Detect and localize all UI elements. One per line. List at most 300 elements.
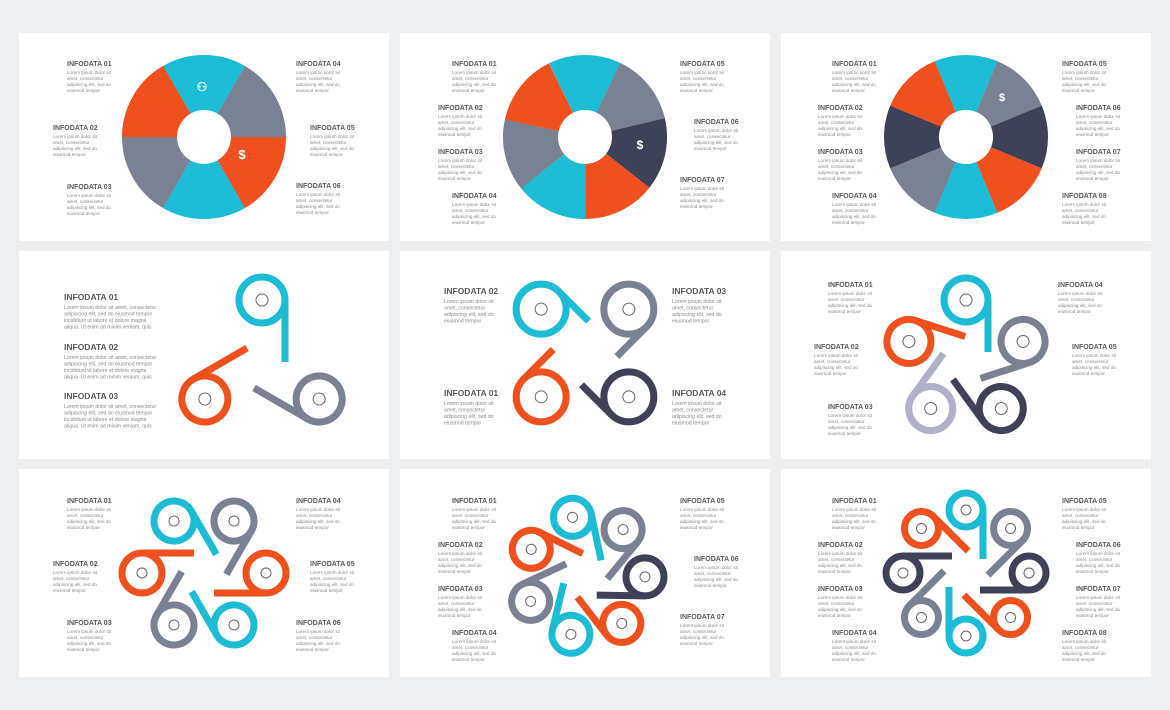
text: labels 01-06: amet, consectetur [67,199,104,204]
text: labels 01-07: adipiscing elit, sed do [438,126,482,131]
text: labels: eiusmod tempor [832,525,865,530]
text: labels: incididunt ut labore et dolore magna [64,368,147,374]
text: labels 01-07: Lorem ipsum dolor sit [452,70,497,75]
text: labels: amet, consectetur [672,408,714,414]
text: labels 01-06: amet, consectetur [53,140,90,145]
text: labels: adipiscing elit, sed do eiusmod tempor [64,362,153,368]
text: labels 01-08: Lorem ipsum dolor sit [818,158,863,163]
text: labels 01-06: INFODATA 06 [296,183,341,190]
text: labels: amet, consectetur [296,635,333,640]
text: labels: eiusmod tempor [452,525,485,530]
text: labels 01-07: amet, consectetur [438,120,475,125]
text: labels: amet, consectetur [672,306,714,312]
text: labels 01-06: amet, consectetur [67,76,104,81]
text: labels: eiusmod tempor [680,525,713,530]
text: labels 01-07: INFODATA 02 [438,105,483,112]
text: labels 01-08: eiusmod tempor [832,88,865,93]
panel: wheel 6 [53,61,355,216]
text: labels 01-08: INFODATA 06 [1076,105,1121,112]
text: labels: Lorem ipsum dolor sit amet, consectetur [64,404,157,410]
text: labels 01-07: adipiscing elit, sed do [438,170,482,175]
text: labels: adipiscing elit, sed do [1058,303,1102,308]
text: labels: Lorem ipsum dolor sit [672,401,722,407]
text: labels 01-06: adipiscing elit, sed do [310,146,354,151]
text: labels 01-07: amet, consectetur [694,134,731,139]
text: labels: INFODATA 06 [1076,542,1121,549]
text: labels: INFODATA 05 [1072,344,1117,351]
text: labels 01-07: adipiscing elit, sed do [452,82,496,87]
text: labels 01-07: Lorem ipsum dolor sit [438,114,483,119]
text: labels 01-06: Lorem ipsum dolor sit [67,193,112,198]
text: labels: Lorem ipsum dolor sit [832,639,877,644]
text: labels 01-08: adipiscing elit, sed do [1076,170,1120,175]
text: labels 01-07: adipiscing elit, sed do [680,198,724,203]
text: labels 01-06: INFODATA 04 [296,61,341,68]
text: labels: eiusmod tempor [1058,309,1091,314]
text: labels: eiusmod tempor [53,588,86,593]
text: labels: INFODATA 04 [672,388,726,398]
text: labels: INFODATA 05 [1062,498,1107,505]
text: labels: amet, consectetur [1058,297,1095,302]
text: labels: eiusmod tempor [828,309,861,314]
text: labels 01-07: INFODATA 07 [680,177,725,184]
text: labels 01-08: adipiscing elit, sed do [1062,82,1106,87]
text: labels [444,286,726,426]
text: labels: Lorem ipsum dolor sit amet, consectetur [64,355,157,361]
text: labels: INFODATA 02 [53,561,98,568]
text: labels: Lorem ipsum dolor sit [444,401,494,407]
text: labels 01-08: eiusmod tempor [1062,88,1095,93]
text: labels 01-07: amet, consectetur [452,208,489,213]
text: labels 01-06: amet, consectetur [310,140,347,145]
text: labels 01-07: Lorem ipsum dolor sit [694,128,739,133]
chart: 3 loops [173,277,351,430]
text: labels 01-06: INFODATA 03 [67,184,112,191]
chart: 8-segment wheel: $ [999,92,1005,104]
text: labels: INFODATA 01 [832,498,877,505]
panel: 3 loops [64,277,351,430]
text: labels: Lorem ipsum dolor sit [832,507,877,512]
text: labels: Lorem ipsum dolor sit amet, consectetur [64,305,157,311]
text: labels 01-07: INFODATA 04 [452,193,497,200]
text: labels: adipiscing elit, sed do [680,519,724,524]
chart: 8 loops [886,493,1046,653]
text: labels 01-07: INFODATA 03 [438,149,483,156]
text: labels 01-06: eiusmod tempor [67,88,100,93]
text: labels 01-07: eiusmod tempor [438,132,471,137]
text: labels 01-08: amet, consectetur [1062,208,1099,213]
text: labels: eiusmod tempor [694,583,727,588]
text: labels: adipiscing elit, sed do [1072,365,1116,370]
text: labels 01-08: eiusmod tempor [1062,220,1095,225]
text: labels 01-06: eiusmod tempor [296,88,329,93]
text: labels 01-08: Lorem ipsum dolor sit [832,70,877,75]
text: labels: eiusmod tempor [672,420,709,426]
text: labels: amet, consectetur [67,513,104,518]
text: labels: amet, consectetur [310,576,347,581]
text: labels 01-08: INFODATA 07 [1076,149,1121,156]
text: labels: INFODATA 05 [680,498,725,505]
text: labels: INFODATA 03 [672,286,726,296]
text: labels 01-06: eiusmod tempor [67,211,100,216]
text: labels: amet, consectetur [680,629,717,634]
text: labels 01-08: eiusmod tempor [818,132,851,137]
panel: 8 loops [818,493,1121,662]
text: labels: INFODATA 07 [1076,586,1121,593]
text: labels 01-08: eiusmod tempor [1076,132,1109,137]
text: labels 01-07: Lorem ipsum dolor sit [680,186,725,191]
text: labels: amet, consectetur [438,601,475,606]
text: labels: adipiscing elit, sed do [310,582,354,587]
text: labels 01-08: amet, consectetur [1076,164,1113,169]
text: labels: Lorem ipsum dolor sit [67,507,112,512]
text: labels 01-06: INFODATA 01 [67,61,112,68]
text: labels: adipiscing elit, sed do [296,641,340,646]
text: labels 01-07: adipiscing elit, sed do [694,140,738,145]
text: labels: amet, consectetur [444,306,486,312]
text: labels: INFODATA 01 [67,498,112,505]
text: labels: adipiscing elit, sed do [832,651,876,656]
text: labels: amet, consectetur [680,513,717,518]
text: labels: amet, consectetur [1076,601,1113,606]
text: labels: Lorem ipsum dolor sit [818,595,863,600]
text: labels: INFODATA 02 [814,344,859,351]
text: labels: eiusmod tempor [438,613,471,618]
text: labels: INFODATA 04 [296,498,341,505]
text: labels: incididunt ut labore et dolore magna [64,318,147,324]
text: labels: eiusmod tempor [1062,657,1095,662]
text: labels 01-07: Lorem ipsum dolor sit [680,70,725,75]
text: labels: eiusmod tempor [444,420,481,426]
text: labels 01-06: eiusmod tempor [53,152,86,157]
text: labels: eiusmod tempor [1076,569,1109,574]
text: labels: INFODATA 04 [452,630,497,637]
text: labels: adipiscing elit, sed do [1062,519,1106,524]
text: labels: Lorem ipsum dolor sit [310,570,355,575]
text: labels 01-06: amet, consectetur [296,76,333,81]
text: labels: INFODATA 06 [296,620,341,627]
text: labels: amet, consectetur [818,557,855,562]
text: labels: Lorem ipsum dolor sit [444,299,494,305]
text: labels: INFODATA 06 [694,556,739,563]
text: labels: Lorem ipsum dolor sit [1062,639,1107,644]
text: labels: Lorem ipsum dolor sit [818,551,863,556]
text: labels 01-07: eiusmod tempor [694,146,727,151]
text: labels 01-06: adipiscing elit, sed do [67,82,111,87]
text: labels 01-06: INFODATA 05 [310,125,355,132]
text: labels 01-08: INFODATA 04 [832,193,877,200]
text: labels 01-07: INFODATA 01 [452,61,497,68]
text: labels 01-07: adipiscing elit, sed do [680,82,724,87]
text: labels: adipiscing elit, sed do [296,519,340,524]
text: labels: adipiscing elit, sed do [818,563,862,568]
text: labels [438,498,739,662]
text: labels 01-08: Lorem ipsum dolor sit [1076,114,1121,119]
text: labels 01-07 [438,61,739,225]
text: labels: Lorem ipsum dolor sit [1076,551,1121,556]
text: labels: adipiscing elit, sed do [832,519,876,524]
text: labels 01-06: amet, consectetur [296,198,333,203]
text: labels 01-08: adipiscing elit, sed do [832,214,876,219]
text: labels 01-08: adipiscing elit, sed do [818,170,862,175]
text: labels: Lorem ipsum dolor sit [1062,507,1107,512]
text: labels: adipiscing elit, sed do [1076,607,1120,612]
text: labels: eiusmod tempor [444,318,481,324]
text: labels 01-06: Lorem ipsum dolor sit [296,70,341,75]
text: labels: INFODATA 03 [828,404,873,411]
text: labels: eiusmod tempor [1076,613,1109,618]
chart: 7-segment wheel [508,60,662,214]
text: labels: amet, consectetur [296,513,333,518]
text: labels: adipiscing elit, sed do eiusmod tempor [64,410,153,416]
text: labels: adipiscing elit, sed do [1062,651,1106,656]
text: labels: Lorem ipsum dolor sit [53,570,98,575]
text: labels: INFODATA 02 [64,342,118,352]
text: labels 01-08: amet, consectetur [818,164,855,169]
text: labels 01-08: INFODATA 03 [818,149,863,156]
text: labels: eiusmod tempor [452,657,485,662]
text: labels: INFODATA 03 [67,620,112,627]
text: labels: eiusmod tempor [438,569,471,574]
text: labels: adipiscing elit, sed do [672,312,722,318]
text: labels 01-07: amet, consectetur [680,76,717,81]
text: labels 01-06: Lorem ipsum dolor sit [53,134,98,139]
text: labels 01-08: amet, consectetur [832,208,869,213]
text: labels 01-06: eiusmod tempor [310,152,343,157]
text: labels: eiusmod tempor [67,647,100,652]
text: labels: Lorem ipsum dolor sit [828,413,873,418]
text: labels: incididunt ut labore et dolore magna [64,417,147,423]
text: labels: eiusmod tempor [1072,371,1105,376]
text: labels: INFODATA 02 [818,542,863,549]
text: labels 01-07: INFODATA 05 [680,61,725,68]
text: labels 01-08: eiusmod tempor [818,176,851,181]
text: labels: adipiscing elit, sed do [672,414,722,420]
text: labels: Lorem ipsum dolor sit [1076,595,1121,600]
text: labels: eiusmod tempor [818,569,851,574]
text: labels: amet, consectetur [452,645,489,650]
text: labels 01-08: INFODATA 02 [818,105,863,112]
text: labels 01-06: INFODATA 02 [53,125,98,132]
text: labels: adipiscing elit, sed do [818,607,862,612]
text: labels 01-08: amet, consectetur [1062,76,1099,81]
text: labels 01-07: amet, consectetur [452,76,489,81]
text: labels: eiusmod tempor [832,657,865,662]
text: labels: Lorem ipsum dolor sit [672,299,722,305]
panel: 4 loops [444,274,726,432]
text: labels: adipiscing elit, sed do [67,519,111,524]
text: labels: INFODATA 07 [680,614,725,621]
text: labels: Lorem ipsum dolor sit [694,565,739,570]
text: labels: Lorem ipsum dolor sit [452,639,497,644]
text: labels: adipiscing elit, sed do [680,635,724,640]
text: labels 01-08: adipiscing elit, sed do [832,82,876,87]
text: labels: amet, consectetur [53,576,90,581]
text: labels: eiusmod tempor [814,371,847,376]
text: labels: adipiscing elit, sed do [694,577,738,582]
chart: 5 loops [881,278,1051,439]
text: labels: adipiscing elit, sed do [452,519,496,524]
text: labels: INFODATA 01 [452,498,497,505]
text: labels 01-08: amet, consectetur [818,120,855,125]
text: labels: Lorem ipsum dolor sit [1072,353,1117,358]
text: labels 01-06: Lorem ipsum dolor sit [67,70,112,75]
text: labels [818,498,1121,662]
text: labels: eiusmod tempor [680,641,713,646]
text: labels: INFODATA 08 [1062,630,1107,637]
text: labels: eiusmod tempor [828,431,861,436]
text: labels: adipiscing elit, sed do [438,563,482,568]
text: labels: amet, consectetur [452,513,489,518]
text: labels 01-08: amet, consectetur [832,76,869,81]
text: labels: INFODATA 04 [832,630,877,637]
text: labels: Lorem ipsum dolor sit [438,595,483,600]
panel: wheel 8 [818,61,1121,225]
text: labels: INFODATA 05 [310,561,355,568]
text: labels: aliqua. Ut enim ad minim veniam, quis [64,324,152,330]
text: labels [64,292,157,430]
text: labels: amet, consectetur [1062,645,1099,650]
text: labels: amet, consectetur [694,571,731,576]
text: labels: amet, consectetur [438,557,475,562]
text: labels: Lorem ipsum dolor sit [814,353,859,358]
panel: wheel 7 [438,60,739,225]
text: labels: eiusmod tempor [310,588,343,593]
chart: 6 loops [122,494,286,652]
text: labels: amet, consectetur [828,419,865,424]
text: labels: adipiscing elit, sed do [828,303,872,308]
text: labels: amet, consectetur [818,601,855,606]
chart: 4 loops [506,274,664,432]
text: labels: amet, consectetur [444,408,486,414]
text: labels: INFODATA 02 [444,286,498,296]
text: labels: amet, consectetur [1076,557,1113,562]
text: labels: aliqua. Ut enim ad minim veniam, quis [64,374,152,380]
text: labels [814,282,1117,436]
text: labels: INFODATA 01 [444,388,498,398]
text: labels 01-08: Lorem ipsum dolor sit [1062,202,1107,207]
text: labels: Lorem ipsum dolor sit [452,507,497,512]
text: labels 01-08: INFODATA 05 [1062,61,1107,68]
text: labels 01-08: INFODATA 08 [1062,193,1107,200]
text: labels: amet, consectetur [814,359,851,364]
panel: 7 loops [438,495,739,662]
text: labels 01-07: eiusmod tempor [438,176,471,181]
text: labels 01-07: amet, consectetur [438,164,475,169]
text: labels: INFODATA 01 [828,282,873,289]
text: labels 01-07: Lorem ipsum dolor sit [438,158,483,163]
text: labels 01-07: eiusmod tempor [680,204,713,209]
text: labels: adipiscing elit, sed do [444,414,494,420]
text: labels: Lorem ipsum dolor sit [296,629,341,634]
text: labels 01-08: adipiscing elit, sed do [818,126,862,131]
text: labels: adipiscing elit, sed do [444,312,494,318]
text: labels 01-08: adipiscing elit, sed do [1062,214,1106,219]
text: labels: adipiscing elit, sed do [814,365,858,370]
text: labels: INFODATA 02 [438,542,483,549]
text: labels 01-07: INFODATA 06 [694,119,739,126]
text: labels: amet, consectetur [1072,359,1109,364]
text: labels: eiusmod tempor [1062,525,1095,530]
text: labels: INFODATA 04 [1058,282,1103,289]
text: labels 01-08: eiusmod tempor [832,220,865,225]
text: labels: amet, consectetur [832,645,869,650]
text: labels 01-07: amet, consectetur [680,192,717,197]
text: labels 01-08: Lorem ipsum dolor sit [818,114,863,119]
text: labels: Lorem ipsum dolor sit [438,551,483,556]
text: labels 01-08: eiusmod tempor [1076,176,1109,181]
text: labels: eiusmod tempor [818,613,851,618]
text: labels: adipiscing elit, sed do [452,651,496,656]
panel: 6 loops [53,494,355,652]
chart: 6-segment wheel: $ [238,147,246,162]
text: labels: adipiscing elit, sed do [53,582,97,587]
text: labels 01-06 [53,61,355,216]
text: labels: INFODATA 03 [438,586,483,593]
text: labels: eiusmod tempor [672,318,709,324]
text: labels 01-08 [818,61,1121,225]
text: labels: Lorem ipsum dolor sit [1058,291,1103,296]
text: labels: eiusmod tempor [296,647,329,652]
text: labels: amet, consectetur [1062,513,1099,518]
text: labels 01-07: Lorem ipsum dolor sit [452,202,497,207]
text: labels 01-07: eiusmod tempor [452,220,485,225]
chart: 6-segment wheel [130,63,278,211]
chart: 7 loops [505,495,664,657]
text: labels 01-06: Lorem ipsum dolor sit [296,192,341,197]
text: labels 01-07: eiusmod tempor [452,88,485,93]
text: labels 01-08: amet, consectetur [1076,120,1113,125]
text: labels: INFODATA 03 [64,391,118,401]
text: labels 01-08: Lorem ipsum dolor sit [1062,70,1107,75]
text: labels [53,498,355,652]
text: labels: Lorem ipsum dolor sit [828,291,873,296]
chart: 7-segment wheel: $ [637,138,644,152]
panel: 5 loops [814,278,1117,439]
text: labels: Lorem ipsum dolor sit [67,629,112,634]
text: labels: eiusmod tempor [296,525,329,530]
text: labels 01-06: adipiscing elit, sed do [53,146,97,151]
text: labels 01-08: Lorem ipsum dolor sit [832,202,877,207]
text: labels 01-06: adipiscing elit, sed do [67,205,111,210]
text: labels: adipiscing elit, sed do eiusmod tempor [64,312,153,318]
text: labels 01-06: eiusmod tempor [296,210,329,215]
text: labels: amet, consectetur [828,297,865,302]
text: labels: adipiscing elit, sed do [67,641,111,646]
chart: 6-segment wheel: ⚇ [197,80,208,94]
text: labels: adipiscing elit, sed do [438,607,482,612]
text: labels 01-06: adipiscing elit, sed do [296,82,340,87]
text: labels: INFODATA 01 [64,292,118,302]
chart: 8-segment wheel [895,66,1037,208]
text: labels: Lorem ipsum dolor sit [296,507,341,512]
text: labels: adipiscing elit, sed do [828,425,872,430]
text: labels 01-06: Lorem ipsum dolor sit [310,134,355,139]
text: labels: Lorem ipsum dolor sit [680,623,725,628]
text: labels 01-08: Lorem ipsum dolor sit [1076,158,1121,163]
text: labels: amet, consectetur [67,635,104,640]
text: labels: Lorem ipsum dolor sit [680,507,725,512]
text: labels: adipiscing elit, sed do [1076,563,1120,568]
text: labels: INFODATA 03 [818,586,863,593]
text: labels 01-07: eiusmod tempor [680,88,713,93]
text: labels: aliqua. Ut enim ad minim veniam, quis [64,424,152,430]
text: labels: eiusmod tempor [67,525,100,530]
text: labels: amet, consectetur [832,513,869,518]
text: labels 01-08: INFODATA 01 [832,61,877,68]
text: labels 01-07: adipiscing elit, sed do [452,214,496,219]
text: labels 01-08: adipiscing elit, sed do [1076,126,1120,131]
